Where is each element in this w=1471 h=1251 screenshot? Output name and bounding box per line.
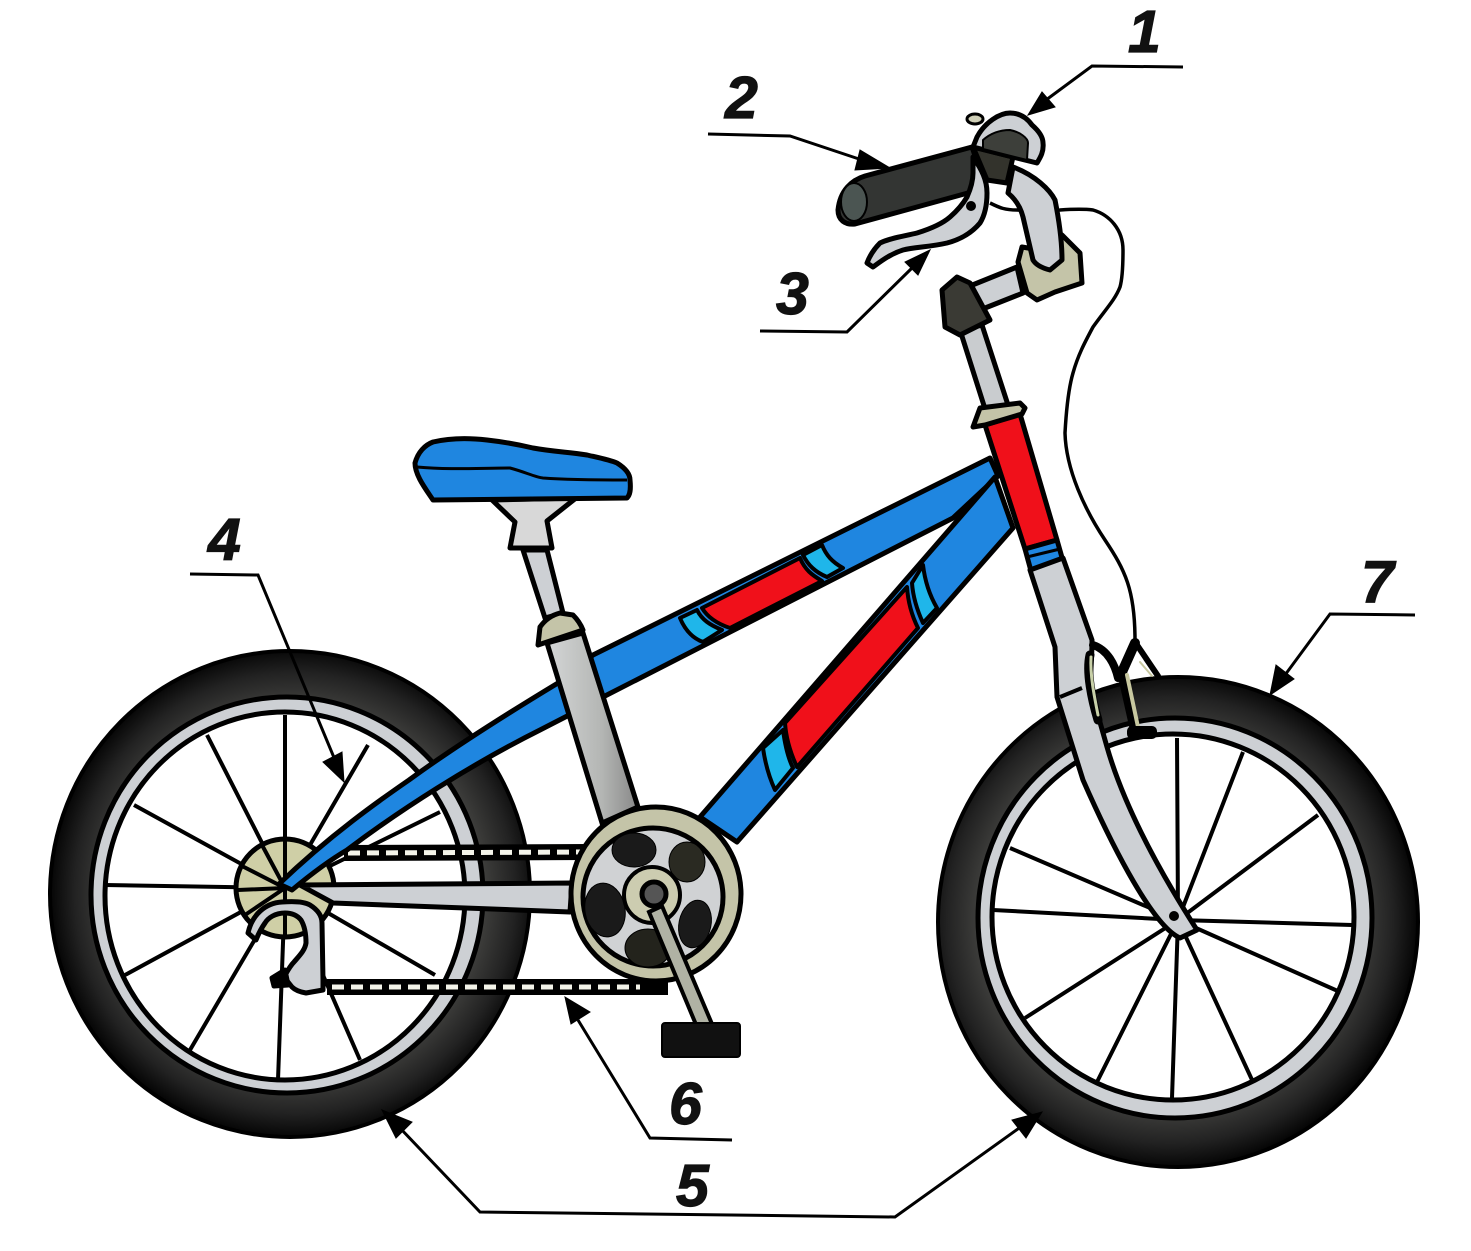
- leader line 6: [565, 997, 732, 1140]
- top tube red band: [702, 558, 822, 628]
- label 5: 5: [676, 1153, 710, 1219]
- top tube cyan stripes: [680, 545, 843, 642]
- stem: [960, 325, 1025, 427]
- leader line 2: [708, 134, 890, 170]
- chainring: [571, 807, 741, 981]
- down tube cyan stripes: [763, 565, 937, 790]
- leader line 1: [1028, 66, 1183, 115]
- head tube: [985, 414, 1063, 571]
- leader line 4: [190, 574, 344, 782]
- label 2: 2: [724, 65, 758, 131]
- leader line 3: [760, 250, 930, 332]
- bell: [973, 113, 1043, 163]
- seat post collar: [538, 613, 583, 645]
- saddle: [415, 439, 630, 548]
- brake lever: [867, 157, 987, 267]
- handlebar tube: [1008, 167, 1062, 270]
- stem head: [942, 277, 990, 335]
- handlebar clamp: [1018, 235, 1082, 300]
- seat post: [523, 550, 563, 618]
- grip: [838, 147, 986, 224]
- leader line 7: [1270, 614, 1415, 695]
- handlebar stem extension: [965, 267, 1023, 312]
- label 6: 6: [669, 1071, 703, 1137]
- fork crown line: [1060, 688, 1082, 697]
- label 3: 3: [776, 261, 809, 327]
- down tube: [700, 477, 1013, 842]
- label 4: 4: [207, 507, 241, 573]
- chain: [327, 852, 668, 987]
- brake cable: [990, 203, 1135, 640]
- handlebar: [838, 113, 1082, 335]
- brake caliper: [1089, 643, 1158, 739]
- pedal and crank: [649, 906, 740, 1057]
- fork hole: [1169, 911, 1179, 921]
- label 1: 1: [1128, 0, 1161, 65]
- top tube: [279, 458, 998, 890]
- seat tube: [547, 633, 638, 823]
- front wheel: [938, 677, 1418, 1167]
- label 7: 7: [1361, 549, 1397, 615]
- rear wheel: [50, 651, 530, 1137]
- fork: [1030, 558, 1197, 938]
- leader line 5: [382, 1110, 1042, 1217]
- rear dropout and chain stay: [248, 883, 572, 993]
- down tube red band: [785, 587, 918, 767]
